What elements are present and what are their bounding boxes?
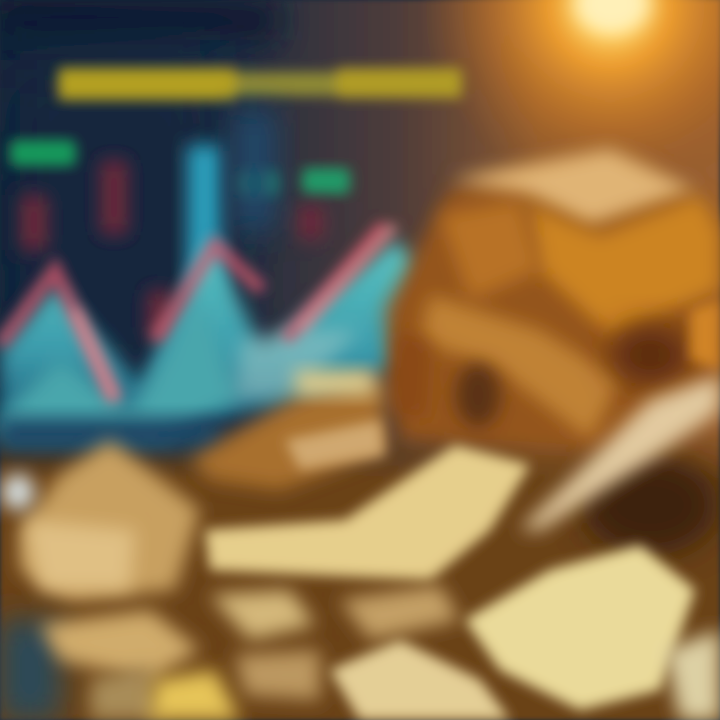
chart: candlesticks and labels <box>10 110 350 340</box>
shadows <box>390 330 430 420</box>
top gold bar <box>450 148 695 225</box>
gold flakes pile <box>2 370 720 720</box>
gold bar face <box>530 195 720 335</box>
red trend line <box>0 225 385 400</box>
left gold bar <box>440 200 540 300</box>
gold bars stack <box>385 148 720 450</box>
area chart <box>0 225 420 450</box>
red candlesticks <box>20 160 325 340</box>
dark right pocket <box>582 455 718 555</box>
green label left <box>10 140 76 166</box>
pink highlights <box>75 225 395 400</box>
green label middle <box>240 170 278 196</box>
blue column <box>187 145 221 295</box>
title <box>58 68 462 100</box>
lower centre flakes <box>210 590 315 640</box>
centre top flakes <box>190 380 385 490</box>
large centre flake <box>205 445 530 580</box>
sun glow <box>428 0 720 155</box>
lower gold bar <box>420 295 620 440</box>
left flakes <box>20 440 200 600</box>
right flakes <box>520 375 720 530</box>
green label right <box>302 168 350 194</box>
